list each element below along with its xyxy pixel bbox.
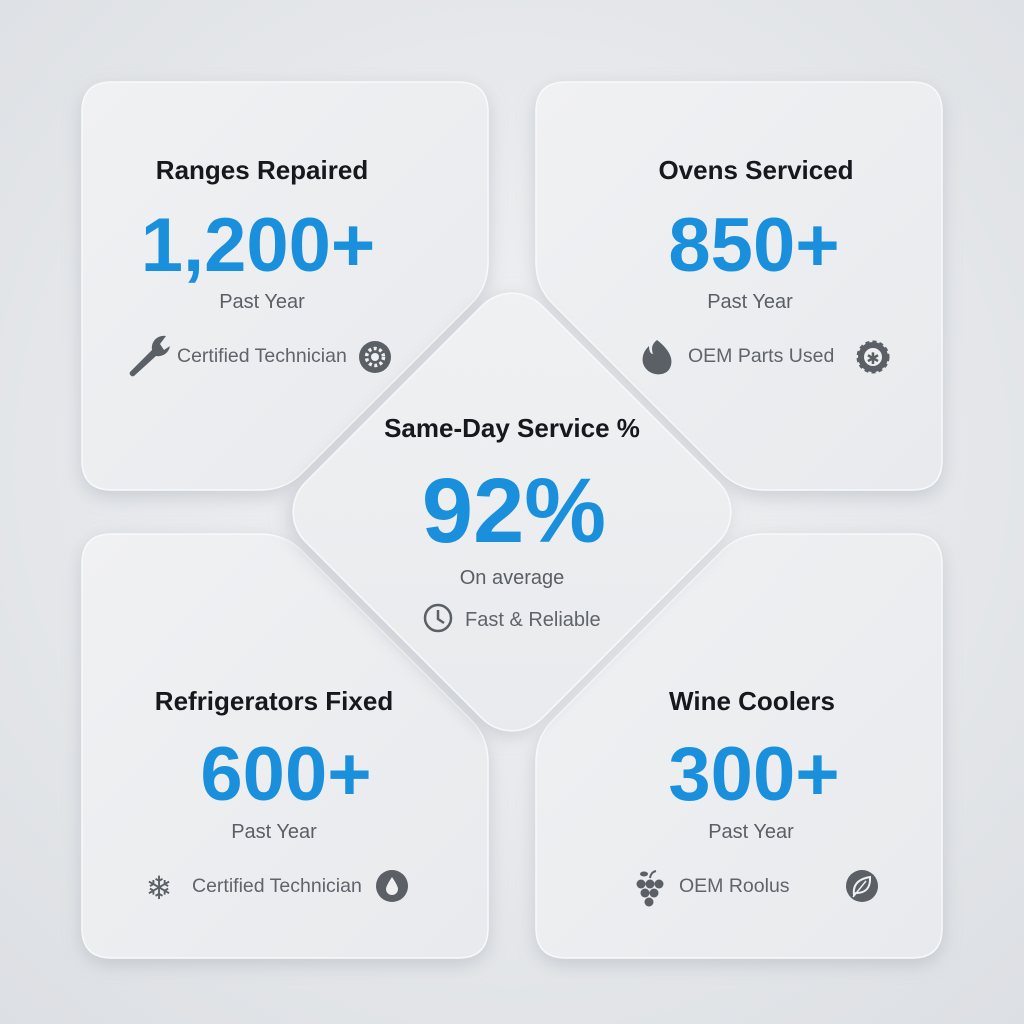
icon: snowflake gear: ✱ bbox=[866, 351, 880, 368]
feature text: OEM Parts Used bbox=[688, 345, 834, 367]
feature text: Certified Technician bbox=[177, 345, 347, 367]
feature text: Certified Technician bbox=[192, 875, 362, 897]
icon: leaf bbox=[846, 870, 878, 902]
subtitle: Past Year bbox=[707, 291, 793, 313]
heading: Ranges Repaired bbox=[156, 155, 368, 185]
heading: Wine Coolers bbox=[669, 686, 835, 716]
icon: flame bbox=[643, 340, 671, 374]
icon: clock bbox=[425, 605, 451, 631]
number: 300+ bbox=[668, 732, 840, 817]
subtitle: Past Year bbox=[708, 821, 794, 843]
icon: snowflake gear bbox=[858, 342, 888, 372]
subtitle: Past Year bbox=[231, 821, 317, 843]
subtitle: Past Year bbox=[219, 291, 305, 313]
panel: wine coolers bbox=[536, 534, 942, 958]
subtitle: On average bbox=[460, 567, 564, 589]
panel: same-day service diamond bbox=[276, 276, 748, 748]
number: 850+ bbox=[668, 203, 840, 288]
icon: water drop bbox=[376, 870, 408, 902]
feature text: Fast & Reliable bbox=[465, 609, 601, 631]
icon: grapes bbox=[636, 871, 664, 906]
heading: Ovens Serviced bbox=[658, 155, 854, 185]
number: 600+ bbox=[200, 732, 372, 817]
icon: gear bbox=[359, 341, 391, 373]
icon: wrench bbox=[130, 336, 170, 376]
panel: ovens serviced bbox=[536, 82, 942, 490]
panel: ranges repaired bbox=[82, 82, 488, 490]
heading: Refrigerators Fixed bbox=[155, 686, 393, 716]
number: 1,200+ bbox=[141, 203, 375, 288]
panel: refrigerators fixed bbox=[82, 534, 488, 958]
number: 92% bbox=[422, 460, 606, 562]
heading: Same-Day Service % bbox=[384, 413, 640, 443]
feature text: OEM Roolus bbox=[679, 875, 790, 897]
icon: snowflake: ❄ bbox=[146, 870, 172, 906]
